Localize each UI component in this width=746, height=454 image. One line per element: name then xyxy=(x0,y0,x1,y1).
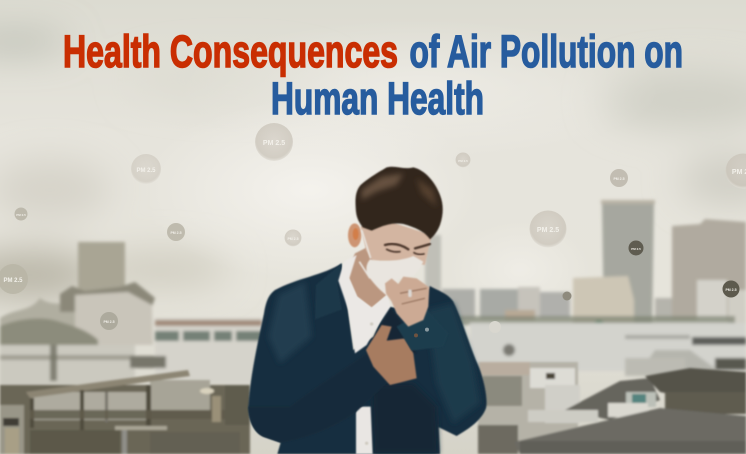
bubble: PM 2.5 xyxy=(458,159,468,163)
bubble xyxy=(489,321,501,333)
bubble xyxy=(100,312,118,330)
title: red part: Health Consequences xyxy=(63,26,398,77)
bubble xyxy=(456,152,470,168)
neck xyxy=(347,247,388,308)
bubble: PM 2.5 xyxy=(136,168,156,174)
ear xyxy=(348,223,361,247)
city foreground: left rooftops xyxy=(0,370,250,454)
bubble xyxy=(167,223,185,241)
city foreground: right rooftops xyxy=(478,362,746,454)
bubble xyxy=(722,280,740,298)
man in mask coughing xyxy=(248,167,487,454)
eyes xyxy=(385,244,430,254)
bubble: PM 2.5 xyxy=(170,231,182,235)
white shirt xyxy=(338,255,391,454)
bubble xyxy=(610,169,628,187)
raised fist xyxy=(385,277,429,327)
bubble xyxy=(14,208,28,220)
city skyline: right xyxy=(425,200,746,376)
right sleeve and cuff xyxy=(397,309,448,351)
bubble xyxy=(726,154,746,188)
face mask xyxy=(359,230,423,296)
city skyline: left xyxy=(0,242,262,387)
bubble xyxy=(562,292,572,300)
bubble xyxy=(284,230,302,246)
hair xyxy=(355,167,443,239)
PM 2.5 bubbles xyxy=(0,123,746,333)
title xyxy=(63,26,683,124)
title: blue part, line 2: Human Health xyxy=(271,73,484,124)
bubble: PM 2.5 xyxy=(631,247,641,251)
bubble xyxy=(0,264,28,294)
bubble: PM 2.5 xyxy=(3,278,23,284)
bubble: PM 2.5 xyxy=(613,177,625,181)
lower hand on chest xyxy=(366,325,417,385)
jacket xyxy=(248,263,487,454)
bubble: PM 2.5 xyxy=(725,288,737,292)
face xyxy=(361,218,432,265)
arm across chest xyxy=(248,352,390,443)
bubble xyxy=(628,240,644,256)
bubble: PM 2.5 xyxy=(537,227,559,234)
bubble: PM 2.5 xyxy=(16,213,26,217)
bubble: PM 2.5 xyxy=(103,320,115,324)
bubble xyxy=(131,154,161,184)
bubble xyxy=(255,123,293,161)
bubble: PM 2.5 xyxy=(263,140,285,147)
bubble xyxy=(530,210,566,248)
bubble: PM 2.5 xyxy=(287,237,299,241)
